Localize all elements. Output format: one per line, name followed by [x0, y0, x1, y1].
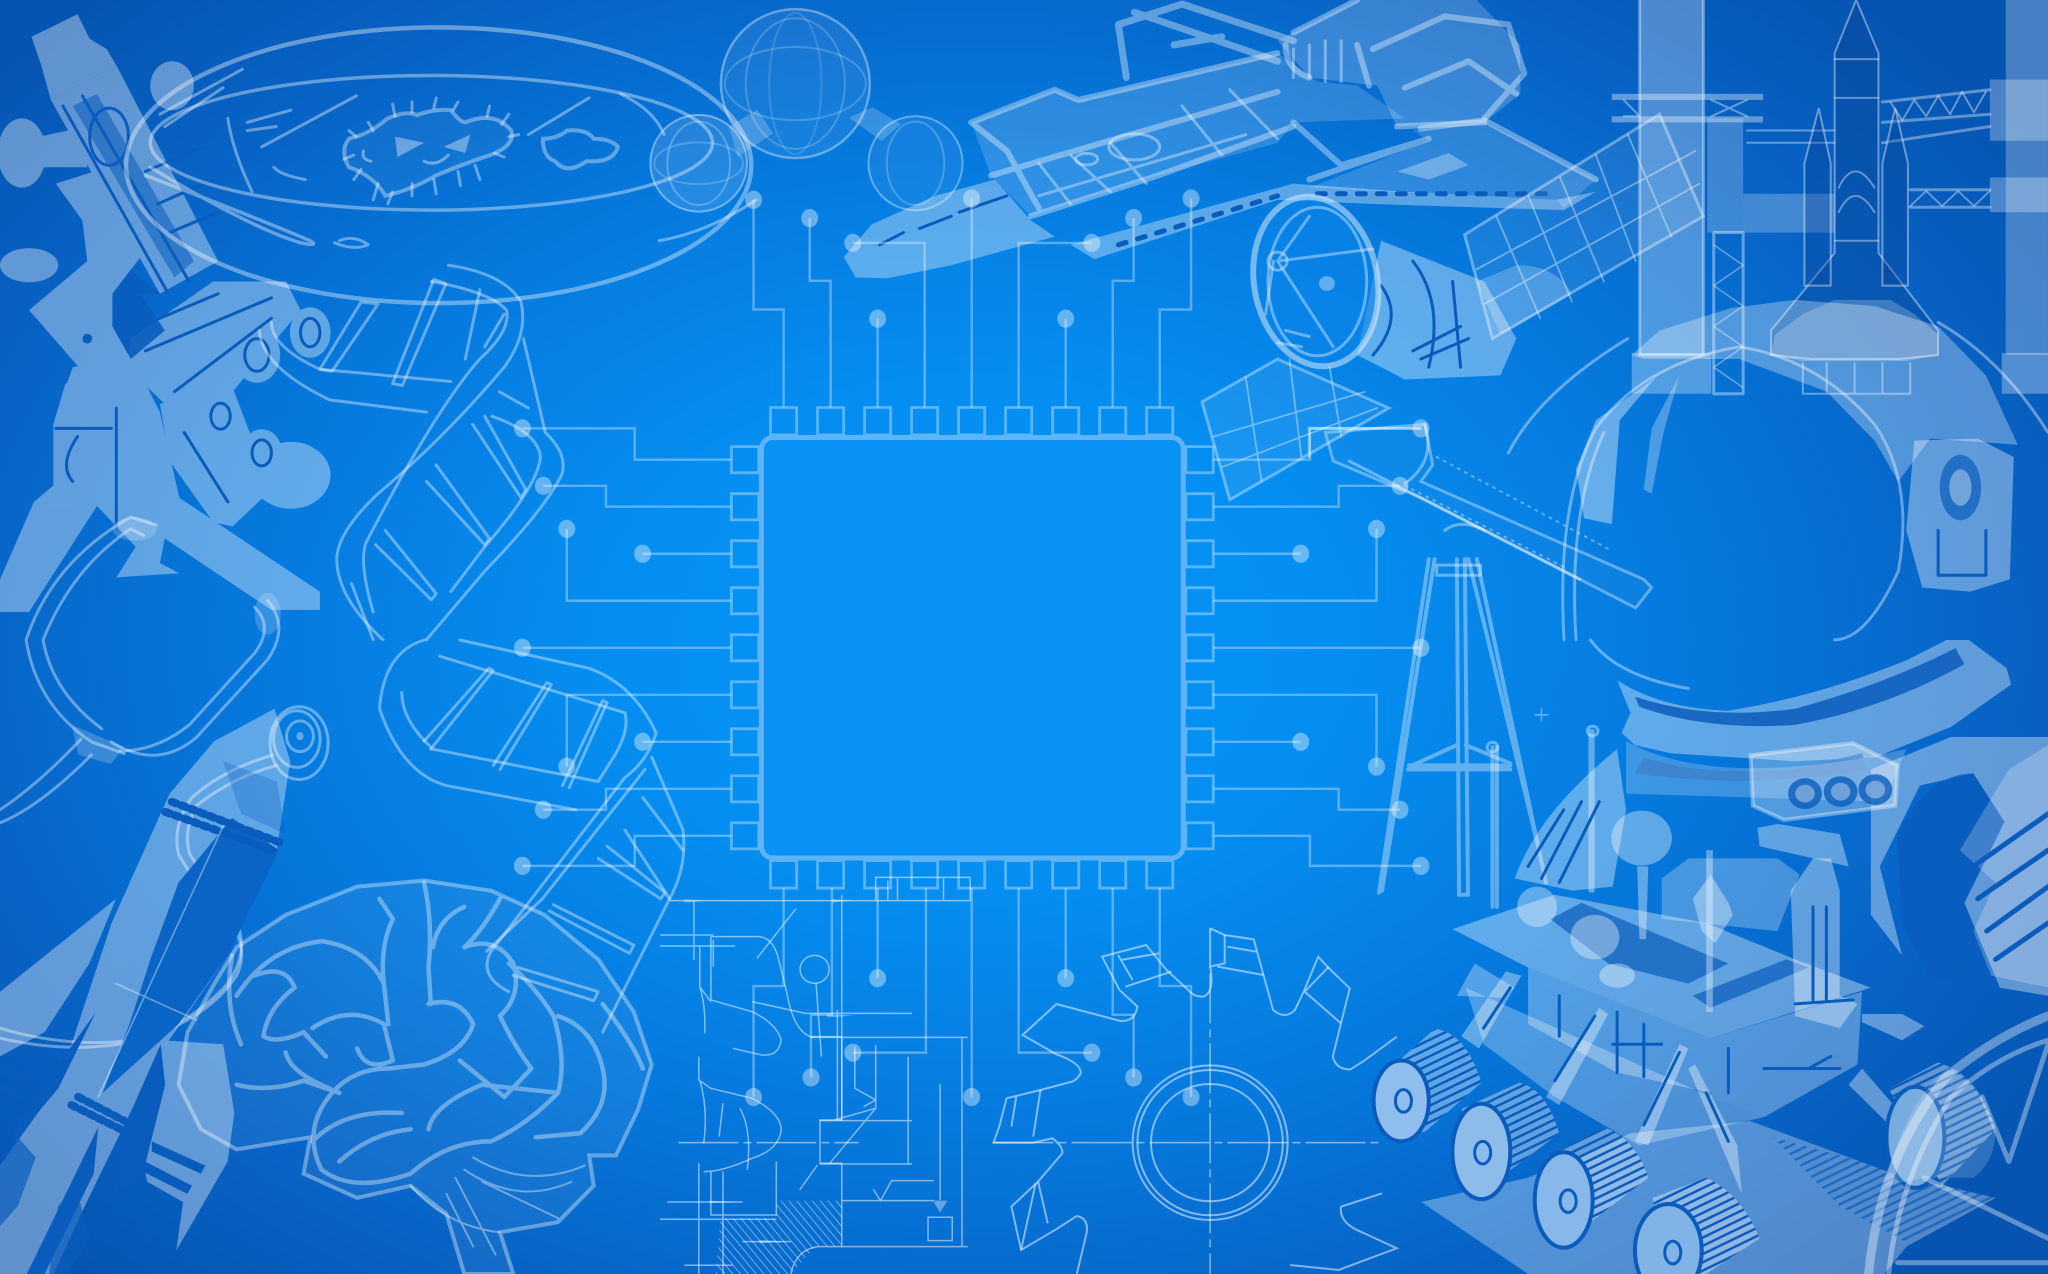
icon: astronaut — [1457, 300, 2048, 998]
rocket and shuttle stack — [1771, 0, 1938, 394]
icon: molecule — [650, 9, 963, 212]
icon: DNA helix — [259, 265, 684, 1032]
rover deck — [1452, 858, 1871, 1117]
icon: satellite with dish and solar panels — [1202, 114, 1703, 500]
right tower — [1882, 0, 2048, 394]
helmet — [1508, 300, 2048, 640]
rover wheels — [1374, 1029, 1996, 1274]
icon: launch towers and rocket — [1612, 0, 2048, 394]
rover instruments — [1611, 743, 1924, 1040]
icon: space shuttle and telescope satellite — [844, 0, 1596, 278]
solar panel upper — [1465, 114, 1703, 339]
icon: stethoscope — [0, 517, 328, 1047]
icon: rocket — [0, 709, 290, 1274]
gear — [993, 928, 1397, 1274]
microchip — [731, 407, 1213, 888]
collar and suit — [1457, 640, 2048, 998]
icon: steering wheel ring — [1869, 1016, 2048, 1274]
icon: microscope — [0, 14, 331, 612]
icon: telescope — [1309, 424, 1652, 907]
icon: rover — [1374, 743, 1996, 1274]
left tower — [1612, 0, 1835, 394]
solar panel lower — [1202, 359, 1389, 500]
chip pins — [731, 407, 1213, 888]
icon: brain — [179, 881, 652, 1274]
chip body — [761, 438, 1183, 858]
technical drawing — [660, 877, 1397, 1274]
icon: petri dish — [126, 27, 756, 303]
trace end dots — [514, 189, 1429, 1106]
telescope tube — [1309, 424, 1652, 608]
bacteria colony — [344, 98, 519, 204]
rover legs — [1461, 972, 1911, 1194]
rover ground — [1421, 988, 1996, 1274]
circuit traces — [514, 189, 1429, 1106]
telescope tripod — [1379, 559, 1598, 907]
